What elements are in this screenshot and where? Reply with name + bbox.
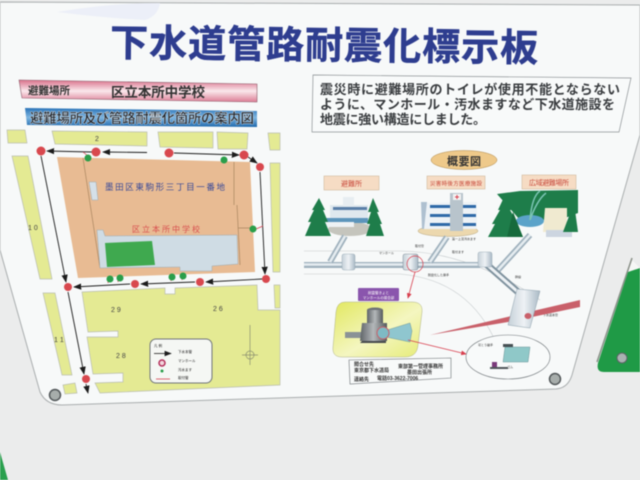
map: manholes	[36, 146, 270, 383]
illustration: joint detail: ゴム	[507, 364, 513, 369]
label: manhole detail: 耐震管きょと	[368, 290, 389, 295]
heading: overview oval	[431, 150, 497, 170]
label: medical facility: 災害時後方医療施設	[430, 180, 482, 188]
connection shaft	[508, 289, 540, 328]
map: school label: 区立本所中学校	[132, 224, 200, 234]
screw: bottom right	[550, 374, 560, 384]
map: block numbers: 2 9	[111, 307, 121, 314]
map: sports field	[105, 241, 155, 267]
label: medical facility	[427, 176, 485, 189]
map: sewer pipes	[41, 151, 265, 393]
diagram: tiny pipe labels: 取付管	[415, 243, 424, 248]
map: small annex	[89, 182, 98, 200]
diagram: tiny pipe labels: 下水道本管	[543, 312, 558, 317]
map: legend: 下水本管	[178, 349, 192, 354]
contact info box: 連絡先	[354, 376, 369, 383]
trunk sewer	[430, 300, 580, 335]
diagram: tiny pipe labels: 第一上流汚水ます	[452, 236, 476, 241]
map	[7, 130, 280, 394]
thin boundary curves	[304, 251, 540, 345]
map: block numbers: 2	[95, 136, 99, 143]
map: legend: マンホール	[178, 358, 196, 363]
map: north mark	[242, 325, 258, 365]
description text box: 震災時に避難場所のトイレが使用不能とならない	[320, 82, 620, 97]
map: school internal boundaries	[83, 158, 250, 268]
map: sewage inlets	[84, 154, 256, 282]
diagram: tiny pipe labels: 幹線	[515, 274, 521, 279]
label: manhole detail	[358, 288, 399, 301]
red callout arrow to manhole	[408, 272, 415, 298]
map: legend: 汚水ます	[178, 367, 192, 372]
diagram: tiny pipe labels: 取付ます	[452, 249, 464, 254]
banner: shelter name: 区立本所中学校	[111, 84, 206, 100]
map: block numbers: 2 6	[213, 306, 223, 313]
green corner at bottom left	[0, 452, 8, 480]
contact info box: 墨田出張所	[407, 369, 432, 376]
map: block numbers: 1 1	[54, 337, 64, 344]
contact info box: 電話03-3622-7006	[377, 375, 418, 382]
contact info box	[349, 358, 451, 384]
map: legend: 凡 例	[154, 343, 162, 348]
contact info box: 問合せ先	[354, 361, 374, 368]
description text box: ように、マンホール・汚水ますなど下水道施設を	[320, 97, 615, 112]
overview diagram	[304, 150, 580, 384]
illustration: manhole detail	[333, 302, 422, 357]
diagram: tiny pipe labels: マンホール	[379, 250, 394, 255]
heading: overview oval: 概要図	[447, 155, 481, 168]
description text box: 地震に強い構造にしました。	[320, 112, 486, 127]
map: legend	[150, 339, 212, 383]
banner: shelter name	[19, 80, 257, 102]
map: service connections	[83, 152, 263, 283]
label: shelter	[324, 176, 379, 190]
banner: map title: 避難場所及び管路耐震化箇所の案内図	[30, 110, 254, 126]
illustration: joint detail: 可とう継手	[478, 342, 493, 347]
illustration: wide-area park	[488, 190, 578, 237]
map: legend: 取付管	[178, 375, 189, 380]
map: block numbers: 2 8	[116, 353, 126, 360]
label: wide-area shelter	[522, 175, 576, 189]
reflection patch on sign	[57, 3, 160, 20]
title: 下水道管路耐震化標示板	[110, 23, 538, 70]
map: school grounds	[57, 157, 255, 278]
green panel at right	[597, 240, 640, 372]
contact info box: 東京都下水道局	[354, 367, 389, 374]
map: street blocks	[7, 130, 280, 394]
label: wide-area shelter: 広域避難場所	[529, 178, 569, 187]
red callout arrow to joint detail	[408, 340, 466, 354]
illustration: shelter school	[305, 197, 384, 236]
illustration: hospital	[418, 193, 478, 236]
description text box	[312, 75, 631, 132]
map: address label: 墨田区東駒形三丁目一番地	[105, 182, 225, 192]
banner: shelter name: 避難場所	[28, 84, 70, 97]
diagram: tiny pipe labels	[379, 236, 558, 317]
map: block numbers: 1 0	[28, 225, 38, 232]
sewer main and service pipes	[304, 235, 530, 292]
map: block numbers	[28, 136, 223, 360]
contact info box: 東部第一管理事務所	[398, 363, 443, 370]
screw: bottom left	[50, 390, 60, 400]
label: manhole detail: マンホールの接合部	[363, 295, 395, 300]
illustration: joint detail	[466, 335, 550, 379]
label: shelter: 避難所	[341, 179, 362, 188]
map: school building	[97, 230, 238, 271]
diagram: tiny pipe labels: 耐震化した接手	[428, 272, 449, 277]
